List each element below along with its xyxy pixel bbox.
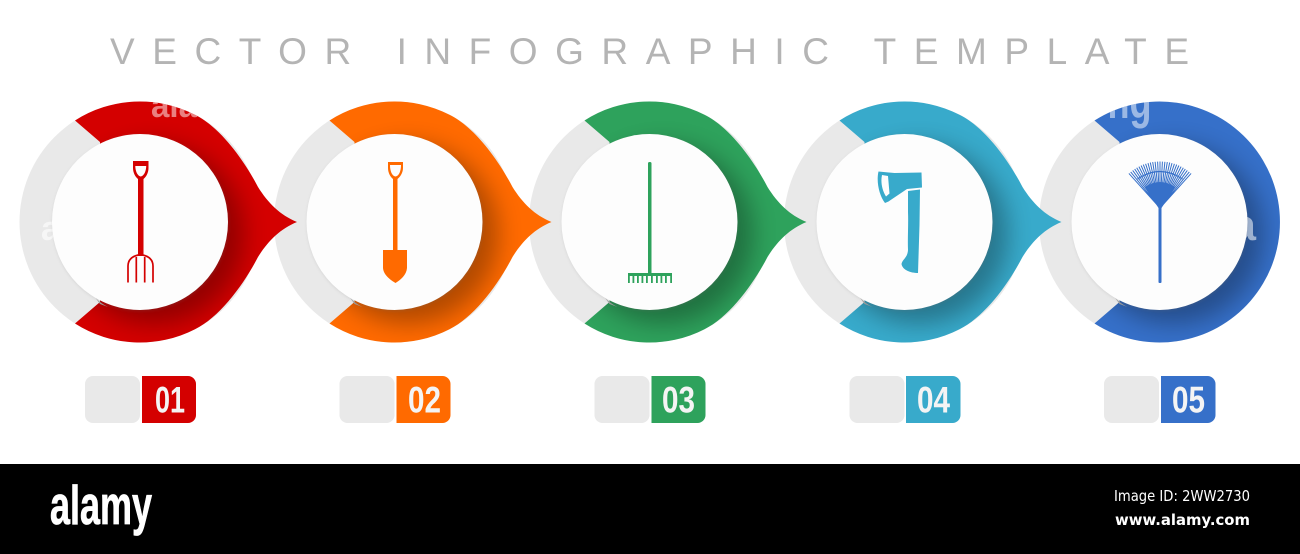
- number badge 03: [594, 376, 706, 423]
- grey ring: [529, 102, 770, 342]
- footer bar: [0, 464, 1300, 554]
- icon: garden rake: [628, 162, 672, 283]
- icon: leaf rake: [1129, 162, 1191, 283]
- colored pin: [318, 101, 552, 343]
- panel: step 4 teal axe: [784, 101, 1062, 343]
- number badge 01: [85, 376, 196, 423]
- number badge 04: 04: [917, 380, 950, 420]
- number badge 05: [1104, 376, 1216, 423]
- number badge 04: [850, 376, 960, 423]
- icon: pitchfork: [128, 161, 153, 282]
- panel: step 1 red pitchfork: [20, 87, 297, 343]
- number badge 05: 05: [1172, 380, 1205, 420]
- grey ring: [274, 102, 515, 342]
- colored pin: ala: [151, 87, 198, 125]
- icon: shovel: [383, 162, 407, 283]
- panel: step 3 green garden rake: [529, 101, 806, 343]
- white circle: [52, 134, 228, 311]
- panel: step 5 blue leaf rake: [1040, 102, 1280, 342]
- white circle: [306, 134, 483, 311]
- colored pin: [574, 101, 806, 343]
- number badge 01: 01: [155, 380, 185, 420]
- colored ring: a: [1232, 201, 1256, 250]
- icon: axe: [878, 172, 922, 273]
- colored ring: [1094, 102, 1280, 342]
- title: VECTOR INFOGRAPHIC TEMPLATE: [110, 31, 1189, 72]
- number badge 02: [340, 376, 450, 423]
- grey ring: [784, 102, 1025, 342]
- website: www.alamy.com: [1115, 511, 1250, 529]
- grey ring: a: [41, 210, 61, 248]
- image id: Image ID: 2WW2730: [1114, 487, 1250, 505]
- white circle: [1072, 134, 1248, 311]
- white circle: [816, 134, 993, 311]
- grey ring: [1039, 102, 1280, 342]
- number badge 02: 02: [408, 380, 441, 420]
- colored pin: [75, 102, 297, 342]
- alamy logo: alamy: [50, 474, 152, 536]
- colored pin: [828, 101, 1062, 343]
- grey ring: [20, 102, 260, 342]
- number badge 03: 03: [662, 380, 695, 420]
- white circle: [562, 134, 738, 311]
- colored ring: ng: [1108, 73, 1152, 129]
- panel: step 2 orange shovel: [274, 101, 552, 343]
